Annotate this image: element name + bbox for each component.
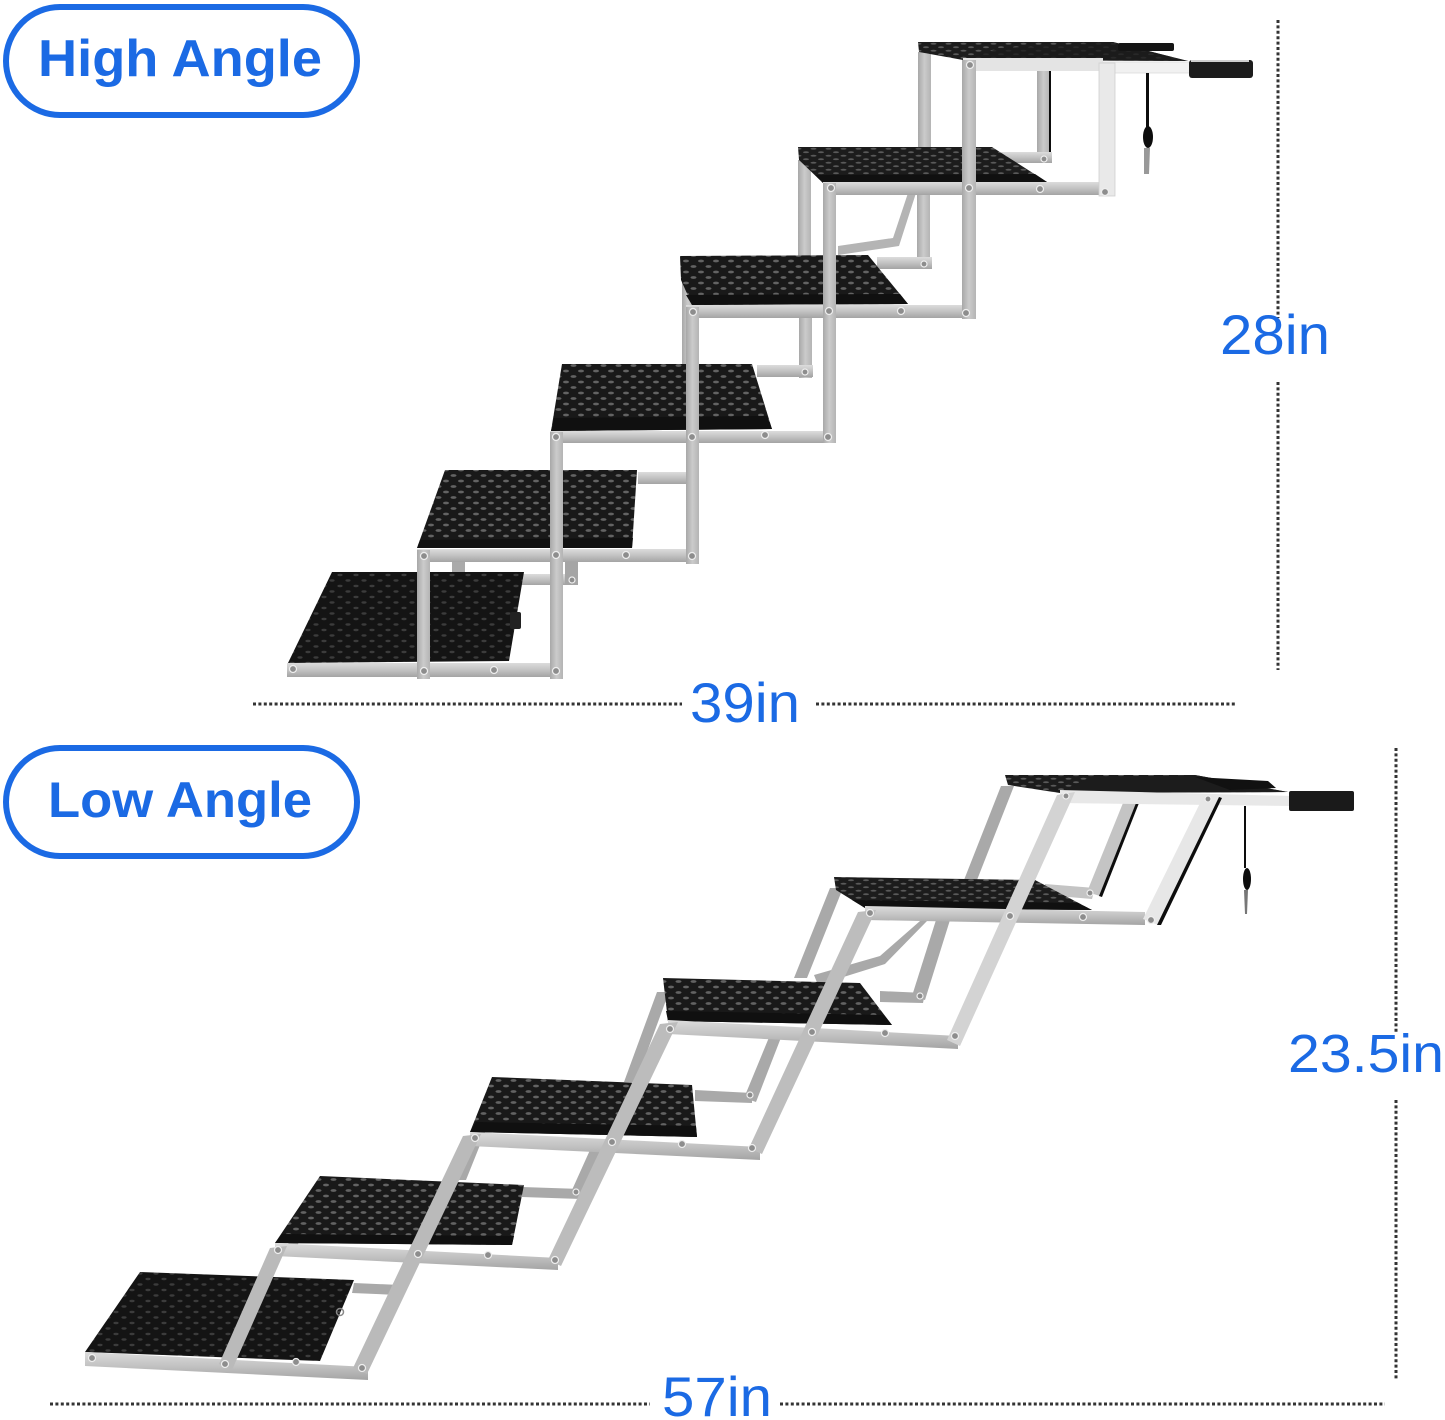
deck 5, low angle — [834, 877, 1092, 910]
label: High Angle — [6, 7, 357, 115]
front slanted posts, low angle — [219, 792, 1222, 1374]
rear frame members, high angle — [452, 52, 1052, 585]
dimension label: 39in: 39in — [690, 671, 800, 734]
horizontal dimension line: 57in length — [50, 1402, 1385, 1406]
low angle folding steps illustration — [85, 775, 1354, 1380]
deck 1 bottom step — [288, 572, 524, 663]
deck 5 — [798, 147, 1047, 183]
bolts, high angle — [290, 62, 1108, 674]
deck 2 — [417, 470, 637, 548]
front posts, high angle — [417, 60, 1115, 679]
label: High Angle: High Angle — [38, 30, 322, 88]
rear frame members, low angle — [286, 786, 1139, 1295]
deck 3, low angle — [470, 1077, 697, 1137]
lanyard high angle — [1143, 73, 1153, 174]
side rails, low angle — [85, 790, 1292, 1380]
deck 2, low angle — [275, 1176, 524, 1245]
deck 3 — [551, 364, 772, 431]
label: Low Angle: Low Angle — [48, 772, 312, 828]
label: Low Angle — [6, 748, 357, 856]
lanyard low angle — [1243, 806, 1251, 914]
deck 4, low angle — [663, 978, 892, 1025]
dimension label: 28in: 28in — [1220, 303, 1330, 366]
bolts, low angle — [88, 793, 1211, 1372]
vertical dimension line: 23.5in height — [1394, 748, 1398, 1380]
deck 6 top step — [918, 42, 1188, 61]
vertical dimension line: 28in height — [1276, 20, 1280, 670]
strap on top step — [1118, 43, 1174, 51]
handle high angle — [1189, 60, 1253, 78]
ring on bottom step, low angle — [336, 1308, 344, 1316]
deck 1 bottom step, low angle — [85, 1272, 354, 1361]
high angle folding steps illustration — [287, 42, 1253, 679]
horizontal dimension line: 39in length — [253, 702, 1237, 706]
side rails, high angle — [287, 58, 1191, 677]
dimension label: 23.5in: 23.5in — [1288, 1024, 1444, 1084]
deck 6 top step, low angle — [1005, 775, 1288, 793]
handle low angle — [1289, 791, 1354, 811]
deck 4 — [680, 255, 908, 305]
latch on bottom step — [510, 612, 521, 629]
